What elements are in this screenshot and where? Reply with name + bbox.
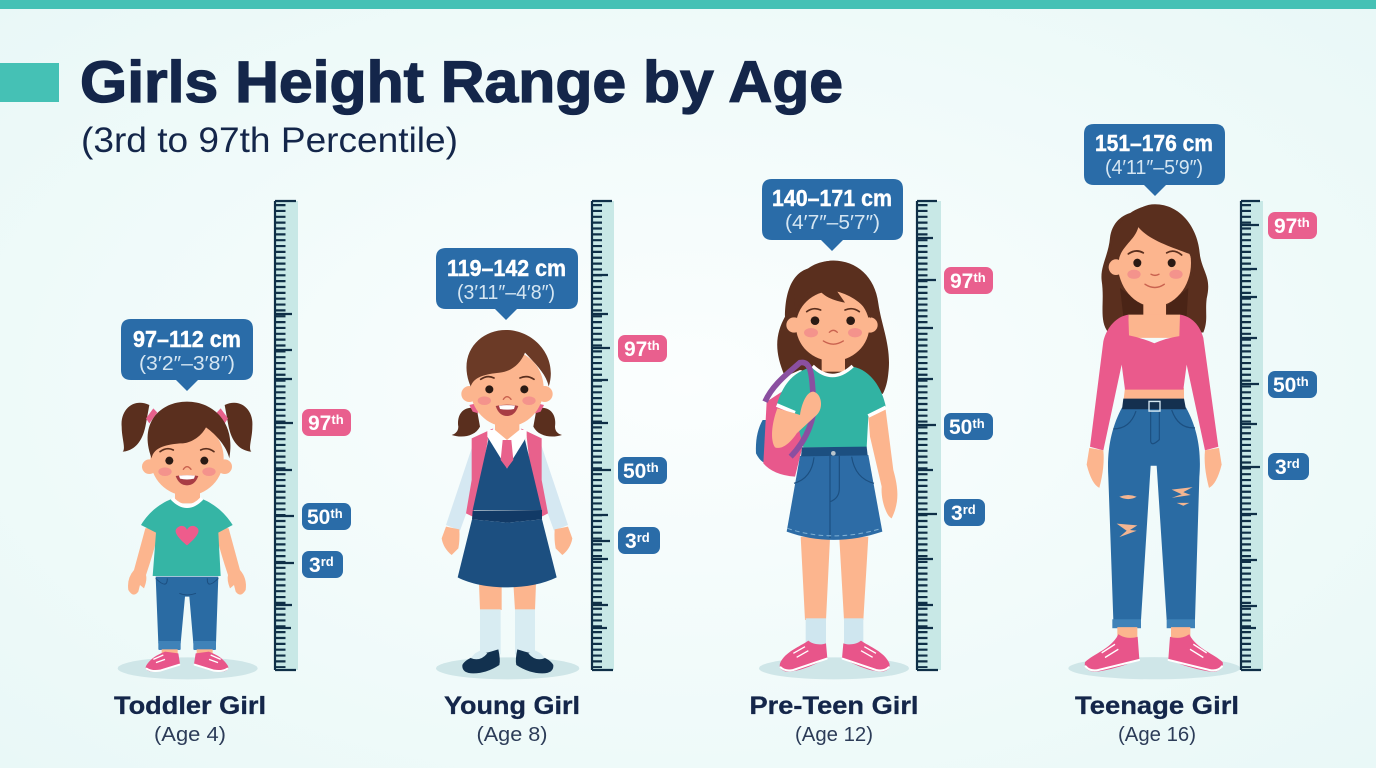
percentile tag: 3rd: 3 — [625, 530, 637, 553]
percentile tag: 97th: 97 — [308, 412, 331, 435]
percentile tag: 50th: th — [972, 416, 985, 431]
figure: toddler girl — [118, 402, 258, 679]
percentile tag: 97th — [618, 335, 667, 362]
callout: 151-176 cm: 151–176 cm — [1095, 130, 1213, 156]
label: teenage girl: Teenage Girl — [1075, 692, 1239, 720]
title accent tab — [0, 63, 59, 102]
callout: 140-171 cm: 140–171 cm — [772, 185, 892, 211]
panel: toddler girl — [114, 201, 351, 746]
percentile tag: 3rd: rd — [1287, 456, 1300, 471]
percentile tag: 50th: th — [646, 460, 659, 475]
callout: 140-171 cm — [762, 179, 903, 251]
panel: pre-teen girl — [750, 179, 993, 746]
percentile tag: 3rd: 3 — [951, 502, 963, 525]
top accent bar — [0, 0, 1376, 9]
percentile tag: 97th: th — [1297, 215, 1310, 230]
callout: 151-176 cm — [1084, 124, 1225, 196]
percentile tag: 50th: 50 — [307, 506, 330, 529]
percentile tag: 97th: th — [973, 270, 986, 285]
percentile tag: 3rd — [302, 551, 343, 578]
label: pre-teen girl: Pre-Teen Girl — [750, 692, 918, 720]
percentile tag: 50th — [1268, 371, 1317, 398]
title: Girls Height Range by Age — [80, 50, 843, 115]
label: pre-teen girl: (Age 12) — [795, 724, 873, 746]
percentile tag: 3rd — [618, 527, 660, 554]
label: young girl: (Age 8) — [476, 724, 548, 746]
percentile tag: 97th: th — [647, 338, 660, 353]
callout: 119-142 cm — [436, 248, 578, 320]
percentile tag: 97th: 97 — [1274, 215, 1297, 238]
percentile tag: 97th — [1268, 212, 1317, 239]
height ruler — [917, 201, 941, 670]
label: pre-teen girl — [750, 692, 918, 746]
figure: pre-teen girl — [756, 261, 909, 679]
percentile tag: 97th: 97 — [624, 338, 647, 361]
percentile tag: 50th: 50 — [623, 460, 646, 483]
label: toddler girl: (Age 4) — [154, 724, 226, 746]
panel: young girl — [436, 201, 667, 746]
height ruler — [1241, 201, 1263, 670]
callout: 151-176 cm: (4′11″–5′9″) — [1105, 157, 1203, 179]
percentile tag: 3rd: rd — [963, 502, 976, 517]
percentile tag: 97th: th — [331, 412, 344, 427]
percentile tag: 3rd: rd — [321, 554, 334, 569]
panel: teenage girl — [1068, 124, 1317, 746]
label: toddler girl — [114, 692, 266, 746]
percentile tag: 50th: 50 — [949, 416, 972, 439]
label: teenage girl — [1075, 692, 1239, 746]
percentile tag: 97th: 97 — [950, 270, 973, 293]
percentile tag: 97th — [944, 267, 993, 294]
label: teenage girl: (Age 16) — [1118, 724, 1196, 746]
label: young girl: Young Girl — [444, 692, 580, 720]
callout: 119-142 cm: (3′11″–4′8″) — [457, 282, 555, 304]
percentile tag: 97th — [302, 409, 351, 436]
percentile tag: 3rd: rd — [637, 530, 650, 545]
percentile tag: 3rd: 3 — [309, 554, 321, 577]
figure: young girl — [436, 330, 579, 679]
label: young girl — [444, 692, 580, 746]
percentile tag: 50th: 50 — [1273, 374, 1296, 397]
callout: 119-142 cm: 119–142 cm — [447, 255, 566, 281]
percentile tag: 50th — [944, 413, 993, 440]
figure: teenage girl — [1068, 204, 1240, 679]
callout: 97-112 cm: 97–112 cm — [133, 326, 241, 352]
callout: 140-171 cm: (4′7″–5′7″) — [785, 212, 880, 234]
percentile tag: 3rd — [1268, 453, 1309, 480]
percentile tag: 50th — [302, 503, 351, 530]
height ruler — [592, 201, 614, 670]
callout: 97-112 cm: (3′2″–3′8″) — [139, 353, 235, 375]
percentile tag: 50th: th — [1296, 374, 1309, 389]
percentile tag: 3rd: 3 — [1275, 456, 1287, 479]
percentile tag: 50th: th — [330, 506, 343, 521]
label: toddler girl: Toddler Girl — [114, 692, 266, 720]
percentile tag: 50th — [618, 457, 667, 484]
callout: 97-112 cm — [121, 319, 253, 391]
subtitle: (3rd to 97th Percentile) — [81, 121, 458, 160]
percentile tag: 3rd — [944, 499, 985, 526]
height ruler — [275, 201, 298, 670]
